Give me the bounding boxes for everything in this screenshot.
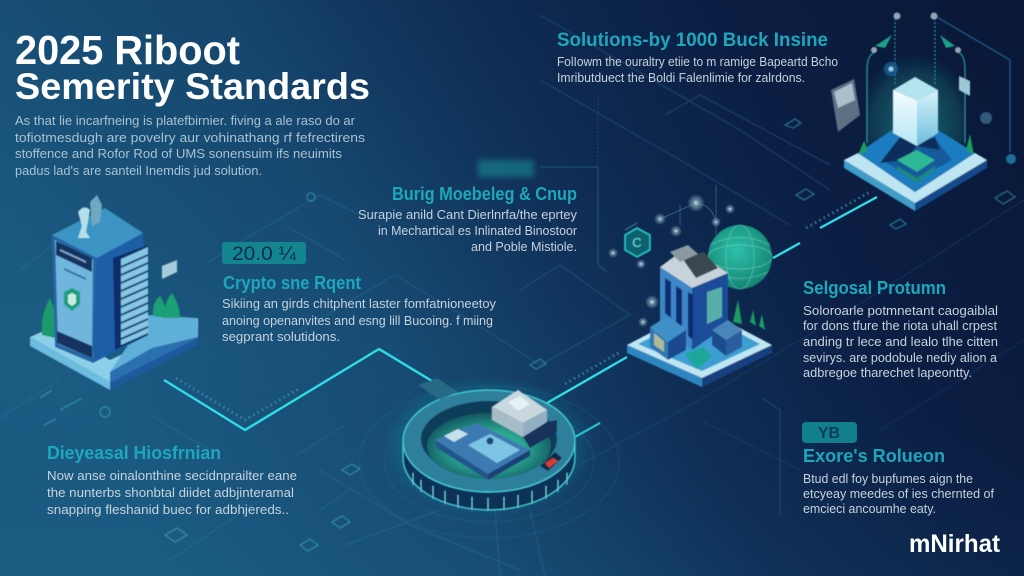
server left face (52, 235, 97, 363)
title (15, 27, 370, 107)
heading: Burig Moebeleg & Cnup (392, 184, 577, 204)
stat badge: YB (818, 425, 840, 442)
teal beam (866, 40, 966, 155)
body: anding tr lece and lealo tlhe citten (803, 335, 998, 349)
server cube (492, 390, 557, 448)
section: Burig (358, 184, 578, 254)
lead nodes (871, 12, 1016, 164)
icon: hexagon badge (625, 228, 650, 257)
heading: Crypto sne Rqent (223, 273, 361, 293)
server top (52, 208, 143, 258)
machine block (435, 423, 530, 480)
platform slab (627, 307, 772, 387)
intro text: As that lie incarfneing is platefbirnier. fiving a ale raso do ar (15, 113, 356, 128)
title: 2025 Riboot (15, 27, 240, 73)
small card (959, 76, 970, 96)
office tower (660, 245, 728, 350)
server base (30, 315, 198, 390)
connector: platform to building (547, 357, 627, 403)
body: adbregoe tharechet lapeontty. (803, 366, 972, 380)
icon: key on roof (78, 195, 102, 238)
body: and Poble Mistiole. (471, 240, 577, 254)
heading: Selgosal Protumn (803, 278, 946, 298)
stat badge (802, 422, 857, 443)
mid building platform (625, 225, 772, 387)
platform slab (844, 130, 987, 211)
body (803, 472, 995, 516)
small circuit board (418, 378, 458, 400)
intro text: stoffence and Rofor Rod of UMS sonensuim ifs neuimits (15, 146, 343, 161)
body: Soloroarle potmnetant caogaiblal (803, 304, 998, 318)
dashed tracks beside connectors (176, 192, 870, 420)
connector: lower platform lead (575, 423, 600, 437)
section: Selgosal (803, 278, 998, 380)
connector: building to top platform (773, 243, 800, 258)
central circular platform (383, 376, 595, 516)
server vent panel (113, 245, 148, 350)
intro text (15, 113, 366, 178)
body (47, 469, 297, 517)
heading: Dieyeasal Hiosfrnian (47, 443, 221, 463)
intro text: tofiotmesdugh are povelry aur vohinathang rf fefrectirens (15, 130, 366, 145)
intro text: padus lad's are santeil Inemdis jud solution. (15, 163, 262, 178)
connector: left zigzag (164, 349, 432, 430)
small right block (712, 320, 742, 356)
green pad (685, 347, 712, 369)
top right crystal platform (831, 12, 1016, 211)
dark wings at crystal base (880, 137, 940, 163)
globe (708, 225, 772, 289)
body: for dons tfure the riota uhall crpest (803, 319, 998, 333)
section: Crypto (222, 242, 497, 344)
green blades (858, 134, 974, 155)
green spikes (733, 300, 765, 330)
section: Solutions (557, 30, 838, 85)
pipes and leads (867, 16, 1010, 152)
small left block (650, 316, 686, 360)
body: Imributduect the Boldi Falenlimie for zalrdons. (557, 71, 805, 85)
heading: Solutions-by 1000 Buck Insine (557, 30, 828, 51)
body: FolIowm the ouraltry etiie to m ramige Bapeartd Bcho (557, 55, 838, 69)
crystal column (893, 77, 938, 146)
faint circuit icons (40, 119, 1015, 551)
body: Sikiing an girds chitphent laster fomfatnioneetoy (222, 297, 497, 311)
body: the nunterbs shonbtal diidet adbjinteramal (47, 486, 294, 500)
body (557, 55, 838, 85)
server right face (93, 233, 148, 363)
glowing nodes (608, 185, 735, 327)
section: Dieyesal (47, 443, 297, 517)
stat badge (222, 242, 306, 265)
platform glow (383, 376, 595, 516)
body: Now anse oinalonthine secidnprailter eane (47, 469, 297, 483)
platform ring top (403, 390, 575, 492)
icon: server tower (30, 195, 198, 390)
body (358, 208, 578, 254)
body (222, 297, 497, 344)
body: in Mechartical es Inlinated Binostoor (378, 224, 577, 238)
body: emcieci ancoumhe eaty. (803, 502, 936, 516)
body: snapping fleshanid buec for adbhjereds.. (47, 503, 289, 517)
body: etcyeay meedes of ies chernted of (803, 487, 995, 501)
green stack (897, 150, 935, 183)
icon: hexagon badge: C (632, 235, 642, 250)
heading: Exore's Rolueon (803, 446, 945, 466)
title: Semerity Standards (15, 66, 370, 107)
floating card (162, 260, 177, 279)
plants (42, 293, 180, 338)
platform ring side (403, 441, 575, 511)
section: Exore (802, 422, 995, 516)
connector: lead to top platform (820, 197, 877, 228)
body: Btud edl foy bupfumes aign the (803, 472, 973, 486)
green arrows (875, 35, 955, 48)
floating orbs (884, 62, 992, 124)
body: anoing openanvites and esng lill Bucoing. f miing (222, 314, 493, 328)
floating document (831, 79, 860, 132)
logo: mNirhat (909, 530, 1001, 558)
cyan connector lines (164, 197, 877, 437)
stat badge: 20.0 ¼ (232, 244, 297, 265)
red chip (540, 452, 562, 471)
body: segprant solutidons. (222, 330, 340, 344)
body: sevirys. are podobule nediy alion a (803, 351, 997, 365)
glowing dash above Burig heading (478, 160, 534, 177)
icon: shield (64, 288, 80, 311)
body (803, 304, 998, 380)
body: Surapie anild Cant Dierlnrfa/the eprtey (358, 208, 578, 222)
